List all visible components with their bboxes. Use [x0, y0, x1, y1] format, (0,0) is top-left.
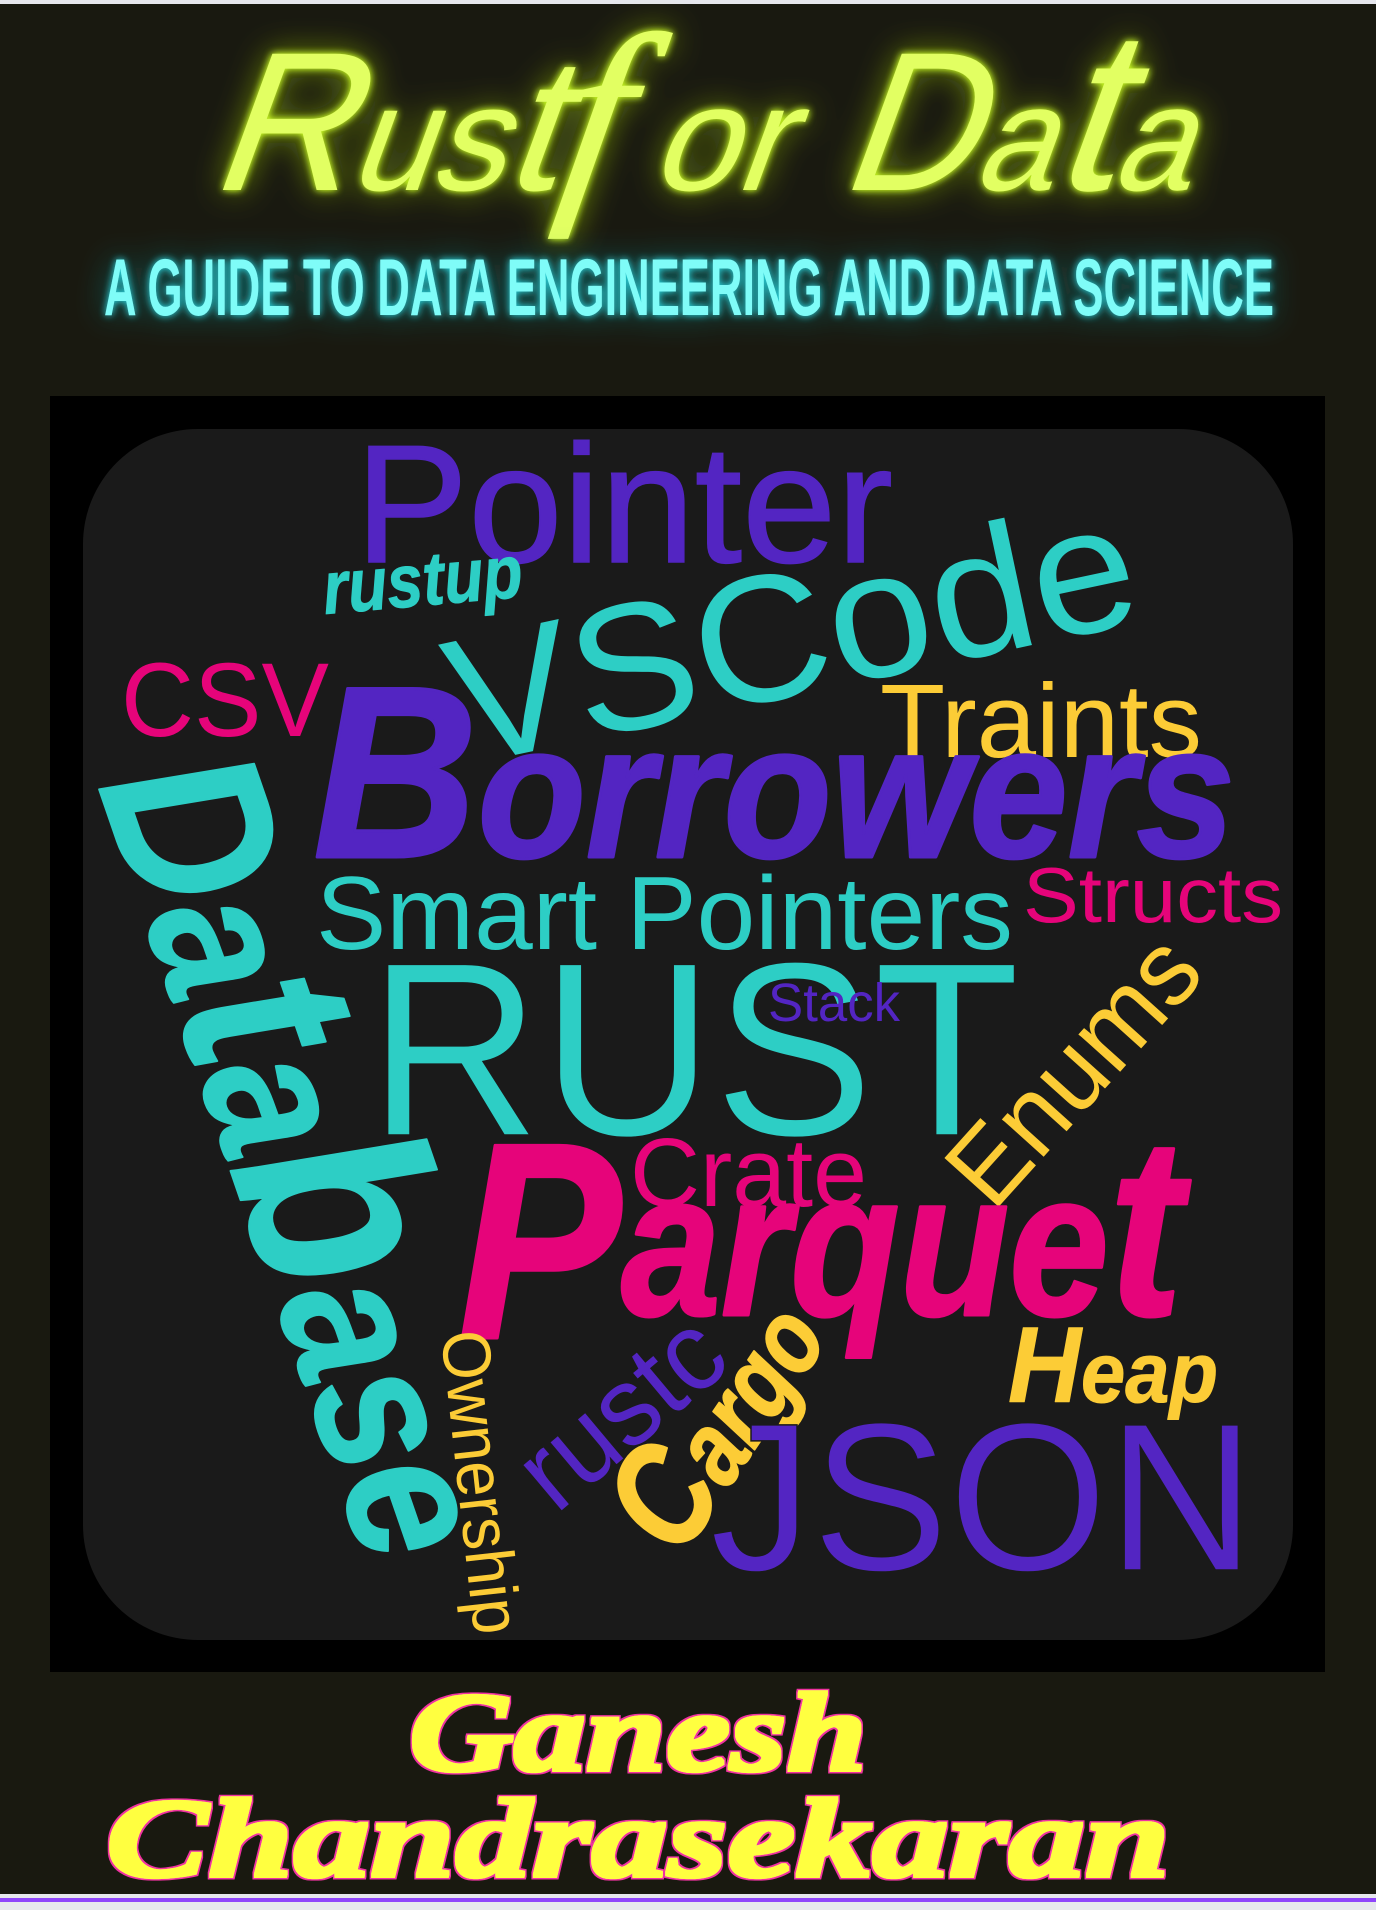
- word: Stack: Stack: [768, 973, 901, 1033]
- word: Enums: Enums: [922, 912, 1224, 1228]
- word: JSON: JSON: [710, 1379, 1255, 1615]
- word: Parquet: arque: [621, 1130, 1109, 1359]
- word: RUST: RUST: [368, 910, 1020, 1188]
- word: CSV: CSV: [121, 642, 329, 759]
- word: rustup: rustup: [319, 529, 526, 630]
- word: Traints: Traints: [880, 663, 1202, 780]
- word: Database: Database: [43, 707, 598, 1590]
- word: Borrowers: Borrowers: [313, 635, 1235, 909]
- author name: [106, 1671, 1170, 1901]
- title: [191, 0, 1263, 240]
- author name: Ganesh: [409, 1671, 867, 1795]
- word: Smart Pointers: Smart Pointers: [316, 856, 1013, 972]
- word: Pointer: Pointer: [355, 410, 893, 598]
- title: Rust: [191, 12, 617, 233]
- word: Ownership: Ownership: [426, 1326, 535, 1638]
- panel: word cloud frame: [43, 396, 1325, 1672]
- word: Heap: Heap: [1008, 1304, 1218, 1425]
- black panel: [50, 396, 1325, 1672]
- word: VSCode: VSCode: [429, 462, 1154, 804]
- author name: Chandrasekaran: [106, 1777, 1170, 1901]
- word: Cargo: Cargo: [571, 1265, 856, 1577]
- word: Crate: Crate: [630, 1118, 867, 1227]
- rounded word cloud background: [83, 429, 1293, 1640]
- word: Structs: Structs: [1023, 851, 1283, 939]
- word: Parquet: P: [458, 1086, 622, 1398]
- word: Parquet: t: [1109, 1085, 1191, 1370]
- title: or: [636, 54, 832, 222]
- word: rustc: rustc: [491, 1289, 749, 1533]
- bottom purple line: [0, 1898, 1376, 1902]
